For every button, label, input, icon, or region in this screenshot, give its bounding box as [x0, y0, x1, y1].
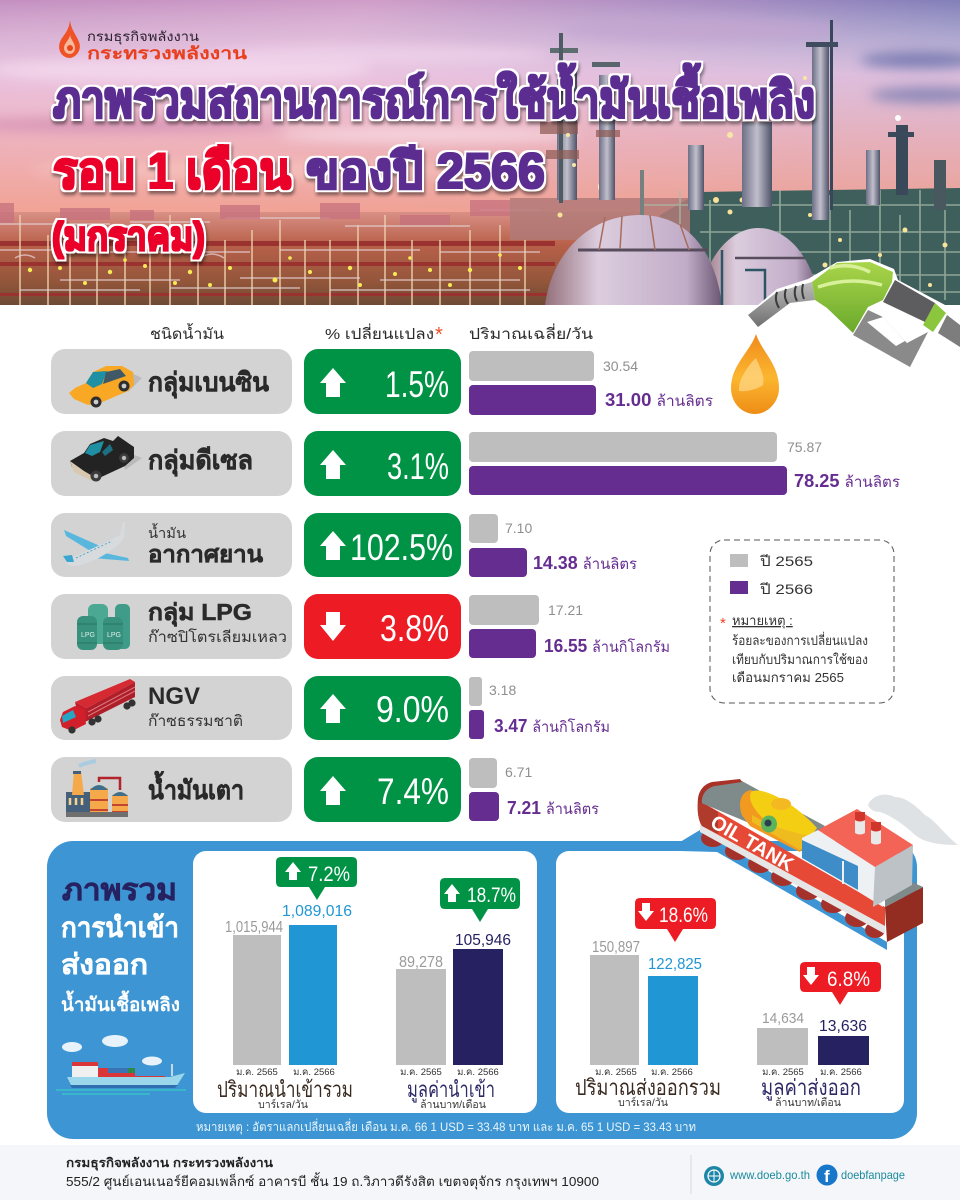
note: เดือนมกราคม 2565 — [732, 670, 844, 685]
row: NGV: ก๊าซธรรมชาติ — [148, 713, 243, 730]
row: fuel oil: 7.4% — [377, 771, 449, 812]
bar chart: export volume: 122,825 — [648, 956, 702, 973]
refinery towers — [550, 20, 946, 220]
address — [66, 1156, 599, 1190]
row: jet fuel: 7.10 — [505, 520, 532, 536]
change badge — [304, 594, 461, 659]
callout: export value change — [800, 962, 881, 1005]
callout: import value change: 18.7% — [467, 884, 516, 907]
footer — [0, 1145, 960, 1200]
bar chart: import volume: บาร์เรล/วัน — [258, 1098, 308, 1111]
bar chart: export volume: บาร์เรล/วัน — [618, 1096, 668, 1109]
row: fuel oil: 7.21 ล้านลิตร — [507, 798, 599, 818]
callout: import volume change — [276, 857, 357, 900]
icon: oil tanker ship — [680, 779, 958, 950]
bar chart: export value: ม.ค. 2566 — [820, 1067, 862, 1078]
bar chart: import volume: 1,089,016 — [282, 903, 352, 920]
label pill — [51, 594, 292, 659]
row: NGV: 3.47 ล้านกิโลกรัม — [494, 716, 610, 736]
title: ของปี 2566 — [306, 143, 545, 199]
legend: 2566 — [730, 581, 813, 597]
column headings: % เปลี่ยนแปลง — [325, 323, 434, 343]
change badge — [304, 676, 461, 740]
storage domes — [710, 228, 813, 305]
bar chart: import value: 89,278 — [399, 954, 443, 971]
icon: cargo ship — [56, 1035, 186, 1094]
column headings: ชนิดน้ำมัน — [150, 323, 224, 343]
bar chart: export volume: ม.ค. 2565 — [595, 1067, 637, 1078]
bars — [469, 432, 777, 462]
legend: 2565 — [730, 553, 813, 569]
bar chart: import volume: ม.ค. 2566 — [293, 1067, 335, 1078]
callout: import value change — [440, 878, 520, 922]
heading: ภาพรวม — [62, 874, 177, 907]
panel: export — [556, 851, 904, 1113]
row: gasohol group: 30.54 — [603, 358, 638, 374]
bar chart: import value: มูลค่านำเข้า — [407, 1077, 495, 1103]
label pill — [51, 676, 292, 740]
icon: yellow car — [69, 366, 142, 408]
bars — [469, 758, 497, 788]
footer: doebfanpage — [841, 1168, 905, 1182]
bar chart: import volume — [217, 903, 353, 1111]
icon: facebook — [816, 1164, 838, 1186]
row: gasohol group: 1.5% — [385, 364, 449, 405]
legend: 2566: ปี 2566 — [759, 581, 813, 597]
row: LPG: 16.55 ล้านกิโลกรัม — [544, 636, 670, 656]
bars — [469, 595, 539, 625]
callout: export value change: 6.8% — [827, 968, 870, 991]
row: diesel group: 3.1% — [387, 446, 449, 487]
row: gasohol group — [51, 349, 713, 415]
row: NGV: NGV — [148, 683, 200, 710]
label pill — [51, 757, 292, 822]
footer: www.doeb.go.th — [729, 1168, 810, 1182]
row: fuel oil — [51, 757, 599, 822]
heading — [61, 874, 180, 1016]
row: NGV: 9.0% — [376, 689, 449, 730]
icon: factory — [66, 761, 128, 817]
bar chart: export value: ม.ค. 2565 — [762, 1067, 804, 1078]
panel: import — [193, 851, 537, 1113]
row: LPG — [51, 594, 670, 659]
change badge — [304, 757, 461, 822]
change badge — [304, 431, 461, 496]
icon: LPG cylinders — [77, 604, 130, 650]
change badge — [304, 349, 461, 414]
column headings — [150, 323, 593, 346]
bar chart: export value: มูลค่าส่งออก — [761, 1075, 861, 1101]
bar chart: import volume: ม.ค. 2565 — [236, 1067, 278, 1078]
title: ภาพรวมสถานการณ์การใช้น้ำมันเชื้อเพลิง — [53, 63, 815, 128]
callout: export volume change: 18.6% — [659, 904, 708, 927]
panel: import and export overview — [47, 841, 917, 1139]
icon: oil drop — [731, 334, 779, 414]
row: gasohol group: กลุ่มเบนซิน — [148, 367, 269, 399]
heading: การนำเข้า — [61, 912, 179, 943]
icon: fuel nozzle — [746, 259, 960, 369]
change badge — [304, 513, 461, 577]
row: fuel oil: น้ำมันเตา — [148, 770, 244, 805]
bar chart: export value: ล้านบาท/เดือน — [775, 1096, 841, 1109]
callout: import volume change: 7.2% — [308, 863, 350, 886]
note — [720, 613, 868, 685]
title: รอบ 1 เดือน — [53, 143, 291, 199]
header photo: refinery at sunset — [0, 0, 960, 305]
row: jet fuel: 102.5% — [350, 527, 453, 568]
label pill — [51, 349, 292, 414]
icon: black pickup — [70, 436, 142, 482]
note: หมายเหตุ : — [732, 613, 793, 629]
row: jet fuel: 14.38 ล้านลิตร — [533, 553, 637, 573]
icon: facebook: f — [824, 1167, 830, 1186]
column headings: * — [435, 324, 443, 346]
row: NGV: 3.18 — [489, 682, 516, 698]
address: กรมธุรกิจพลังงาน กระทรวงพลังงาน — [66, 1156, 273, 1171]
heading: น้ำมันเชื้อเพลิง — [61, 990, 180, 1016]
icon: LPG cylinders: LPG — [81, 632, 95, 639]
bar chart: export value: 14,634 — [762, 1010, 804, 1027]
heading: ส่งออก — [61, 949, 148, 980]
row: jet fuel: น้ำมัน — [148, 523, 186, 541]
bar chart: import value: ล้านบาท/เดือน — [420, 1098, 486, 1111]
legend: 2565: ปี 2565 — [759, 553, 813, 569]
label pill — [51, 513, 292, 577]
row: diesel group: 78.25 ล้านลิตร — [794, 471, 900, 491]
lower plant band — [0, 212, 640, 305]
row: LPG: กลุ่ม LPG — [148, 599, 252, 627]
title: (มกราคม) — [52, 215, 205, 259]
icon: flame emblem — [59, 20, 80, 58]
logo: department of energy business — [59, 20, 247, 63]
exchange rate note: หมายเหตุ : อัตราแลกเปลี่ยนเฉลี่ย เดือน ม.ค. 66 1 USD = 33.48 บาท และ ม.ค. 65 1 USD = 33.43 บาท — [196, 1118, 696, 1135]
row: diesel group: กลุ่มดีเซล — [148, 445, 253, 477]
row: gasohol group: 31.00 ล้านลิตร — [605, 390, 713, 410]
row: diesel group — [51, 431, 900, 496]
bar chart: import volume: ปริมาณนำเข้ารวม — [217, 1077, 353, 1102]
bar chart: import value: 105,946 — [455, 932, 511, 949]
note: ร้อยละของการเปลี่ยนแปลง — [732, 632, 868, 648]
row: LPG: 17.21 — [548, 602, 583, 618]
icon: red truck — [60, 679, 136, 734]
note: * — [720, 615, 726, 632]
address: 555/2 ศูนย์เอนเนอร์ยีคอมเพล็กซ์ อาคารบี ชั้น 19 ถ.วิภาวดีรังสิต เขตจตุจักร กรุงเทพฯ 10900 — [66, 1172, 599, 1190]
icon: LPG cylinders: LPG — [107, 632, 121, 639]
ministry names: กรมธุรกิจพลังงาน — [87, 29, 199, 45]
legend and note — [710, 540, 894, 703]
row: jet fuel — [51, 513, 637, 577]
bar chart: export volume: ปริมาณส่งออกรวม — [575, 1075, 721, 1100]
bar chart: import value: ม.ค. 2565 — [400, 1067, 442, 1078]
logo: department of energy business: กระทรวงพลังงาน — [87, 44, 247, 63]
bar chart: import value — [396, 932, 511, 1111]
bars — [469, 514, 498, 543]
bars — [469, 351, 594, 381]
bar chart: export volume: 150,897 — [592, 939, 640, 956]
row: fuel oil: 6.71 — [505, 764, 532, 780]
note: เทียบกับปริมาณการใช้ของ — [732, 652, 868, 667]
title — [52, 63, 815, 259]
bars — [469, 677, 482, 706]
bar chart: import value: ม.ค. 2566 — [457, 1067, 499, 1078]
bar chart: export value — [757, 1010, 869, 1109]
row: NGV — [51, 676, 610, 740]
bar chart: import volume: 1,015,944 — [225, 919, 283, 936]
callout: export volume change — [635, 898, 716, 942]
icon: website globe — [704, 1166, 724, 1186]
label pill — [51, 431, 292, 496]
right plant dark mass — [660, 188, 960, 305]
bar chart: export volume: ม.ค. 2566 — [651, 1067, 693, 1078]
icon: airplane — [63, 522, 129, 566]
icon: oil tanker ship: OIL TANK — [706, 811, 798, 877]
row: LPG: 3.8% — [380, 608, 449, 649]
row: LPG: ก๊าซปิโตรเลียมเหลว — [148, 628, 287, 646]
column headings: ปริมาณเฉลี่ย/วัน — [469, 323, 593, 343]
row: diesel group: 75.87 — [787, 439, 822, 455]
row: jet fuel: อากาศยาน — [148, 541, 263, 567]
bar chart: export value: 13,636 — [819, 1018, 867, 1035]
bar chart: export volume — [575, 939, 721, 1109]
